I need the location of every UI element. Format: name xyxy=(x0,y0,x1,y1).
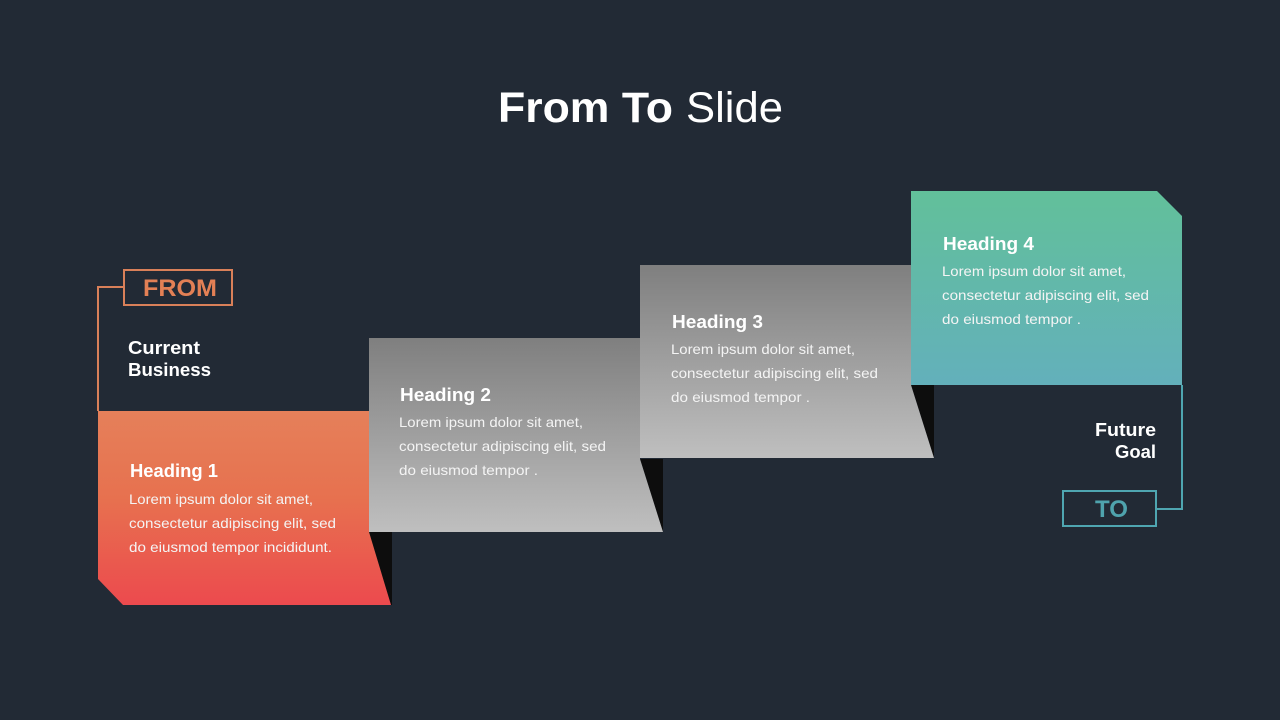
badge: from: FROM xyxy=(143,275,217,302)
badge: to: TO xyxy=(1095,496,1128,523)
panel: step 1 xyxy=(98,411,392,605)
body text 2: do eiusmod tempor . xyxy=(399,462,538,478)
body text 4: consectetur adipiscing elit, sed xyxy=(942,287,1149,303)
body text 1: Lorem ipsum dolor sit amet, xyxy=(129,491,313,507)
card shape xyxy=(640,265,934,458)
body text 2 xyxy=(399,414,606,478)
card shape xyxy=(98,411,391,605)
body text 3: consectetur adipiscing elit, sed xyxy=(671,365,878,381)
connector: to xyxy=(1156,385,1182,509)
body text 2: consectetur adipiscing elit, sed xyxy=(399,438,606,454)
text: future goal: Future xyxy=(1095,420,1156,440)
text: future goal: Goal xyxy=(1115,442,1156,462)
panel: step 4 xyxy=(911,191,1182,385)
heading 2: Heading 2 xyxy=(400,385,491,405)
shadow fold xyxy=(911,385,934,458)
shadow fold xyxy=(640,459,663,532)
panel: step 3 xyxy=(640,265,934,458)
card shape xyxy=(911,191,1182,385)
body text 3 xyxy=(671,341,878,405)
badge: from xyxy=(124,270,232,305)
body text 3: do eiusmod tempor . xyxy=(671,389,810,405)
title: From To xyxy=(498,84,673,132)
connector: from xyxy=(98,287,124,411)
panel: step 2 xyxy=(369,338,663,532)
title xyxy=(498,84,783,132)
badge: to xyxy=(1063,491,1156,526)
body text 1 xyxy=(129,491,336,555)
heading 1: Heading 1 xyxy=(130,461,218,481)
panel: from label xyxy=(98,270,232,411)
text: current business xyxy=(128,338,211,380)
shadow fold xyxy=(369,532,392,605)
card shape xyxy=(369,338,663,532)
text: current business: Current xyxy=(128,338,200,358)
body text 1: do eiusmod tempor incididunt. xyxy=(129,539,332,555)
body text 4 xyxy=(942,263,1149,327)
body text 4: do eiusmod tempor . xyxy=(942,311,1081,327)
body text 4: Lorem ipsum dolor sit amet, xyxy=(942,263,1126,279)
body text 2: Lorem ipsum dolor sit amet, xyxy=(399,414,583,430)
body text 1: consectetur adipiscing elit, sed xyxy=(129,515,336,531)
title: Slide xyxy=(686,84,783,132)
text: future goal xyxy=(1095,420,1156,462)
panel: to label xyxy=(1063,385,1182,526)
body text 3: Lorem ipsum dolor sit amet, xyxy=(671,341,855,357)
text: current business: Business xyxy=(128,360,211,380)
heading 3: Heading 3 xyxy=(672,312,763,332)
heading 4: Heading 4 xyxy=(943,234,1034,254)
